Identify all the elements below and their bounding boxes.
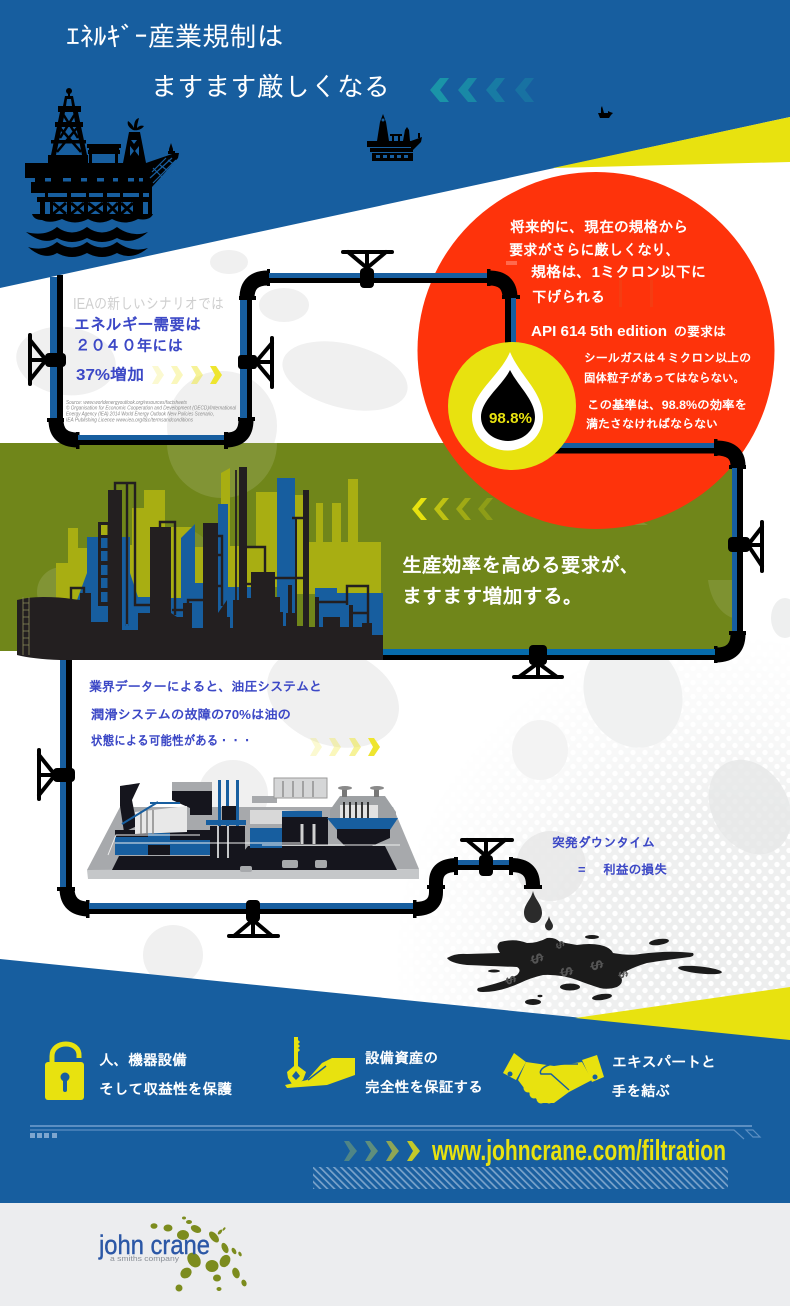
text: energy demand: IEAの新しいシナリオでは bbox=[73, 296, 224, 313]
text: industry data: 潤滑システムの故障の70%は油の bbox=[91, 707, 291, 722]
text: unexpected downtime: = bbox=[578, 862, 585, 877]
title: ｴﾈﾙｷﾞｰ産業規制は bbox=[66, 23, 284, 50]
valve: lower left pipe bbox=[39, 750, 75, 799]
yellow chevrons: industry data bbox=[310, 738, 380, 756]
valve: second vertical pipe bbox=[238, 338, 272, 387]
title bbox=[66, 23, 390, 100]
decorative rule lines bbox=[30, 1126, 760, 1139]
source note: Energy Agency (IEA) 2014 World Energy Outlook New Policies Scenario, bbox=[66, 412, 214, 418]
text: production efficiency bbox=[402, 554, 640, 608]
red circle panel bbox=[418, 172, 774, 529]
text: API 614 requirement: API 614 5th edition bbox=[531, 324, 667, 340]
text: industry data: 状態による可能性がある・・・ bbox=[91, 733, 253, 748]
text: assure integrity bbox=[365, 1050, 483, 1096]
source note: © Organisation for Economic Cooperation and Development (OECD)/International bbox=[66, 404, 237, 412]
text: energy demand: エネルギー需要は bbox=[74, 316, 201, 334]
bottom blue banner bbox=[0, 959, 790, 1203]
text: partner with experts bbox=[612, 1054, 716, 1100]
valve: top pipe bbox=[343, 252, 392, 288]
pipe: upper loop from oil rig bbox=[47, 269, 520, 449]
text: API 614 requirement: この基準は、98.8%の効率を bbox=[587, 398, 747, 412]
valve: right vertical pipe bbox=[728, 522, 762, 571]
text: industry data bbox=[89, 679, 322, 748]
oil rig, small bbox=[367, 114, 422, 161]
text: unexpected downtime: 突発ダウンタイム bbox=[552, 835, 655, 850]
text: unexpected downtime bbox=[552, 835, 667, 877]
text: energy demand bbox=[73, 296, 224, 384]
text: API 614 requirement: シールガスは４ミクロン以上の bbox=[584, 351, 751, 365]
oil drop badge 98.8%: 98.8% bbox=[489, 411, 532, 427]
top yellow wedge bbox=[553, 117, 790, 168]
bottom yellow wedge bbox=[575, 987, 790, 1040]
pipe: right loop from oil drop bbox=[383, 439, 746, 663]
john crane logo: john crane bbox=[98, 1230, 210, 1260]
text: production efficiency: 生産効率を高める要求が、 bbox=[402, 554, 640, 577]
source note: IEA Publishing Licence www.iea.org/t&c/termsandconditions bbox=[66, 418, 193, 424]
text: protect people: 人、機器設備 bbox=[99, 1052, 187, 1069]
source note bbox=[66, 400, 237, 424]
john crane logo bbox=[98, 1216, 248, 1292]
oil rig, tiny distant bbox=[598, 106, 613, 118]
text: production efficiency: ますます増加する。 bbox=[402, 585, 583, 608]
text: red circle future standards: 要求がさらに厳しくなり、 bbox=[509, 242, 680, 259]
oil drop badge 98.8% bbox=[448, 342, 576, 470]
teal chevrons beside title bbox=[430, 78, 534, 102]
footer band bbox=[0, 1203, 790, 1306]
text: assure integrity: 完全性を保証する bbox=[365, 1079, 483, 1096]
source note: Source: www.worldenergyoutlook.org/resources/factsheets bbox=[66, 400, 187, 406]
title: ますます厳しくなる bbox=[151, 73, 390, 100]
faucet bbox=[415, 840, 542, 909]
oil drops from faucet bbox=[524, 891, 553, 931]
valve: lower horizontal pipe bbox=[229, 900, 278, 936]
pipe: lower run to faucet bbox=[57, 660, 416, 918]
icon: padlock bbox=[45, 1044, 84, 1100]
john crane logo: a smiths company bbox=[110, 1254, 179, 1263]
text: API 614 requirement: 固体粒子があってはならない。 bbox=[584, 371, 745, 385]
oil spill with dollar signs: $ bbox=[552, 938, 568, 952]
yellow chevrons: energy demand bbox=[152, 366, 222, 384]
hatched bar bbox=[313, 1167, 728, 1189]
yellow chevrons in green band bbox=[412, 498, 493, 520]
text: partner with experts: 手を結ぶ bbox=[612, 1083, 670, 1100]
text: energy demand: 37%増加 bbox=[76, 366, 144, 384]
text: industry data: 業界データーによると、油圧システムと bbox=[89, 679, 322, 694]
background pattern and blobs bbox=[12, 250, 790, 1040]
text: red circle future standards: 規格は、1ミクロン以下に bbox=[531, 264, 706, 281]
green band bbox=[0, 443, 734, 651]
valve: bottom of green band bbox=[514, 645, 562, 677]
text: red circle future standards: 将来的に、現在の規格から bbox=[510, 219, 688, 236]
text: protect people bbox=[99, 1052, 233, 1098]
text: protect people: そして収益性を保護 bbox=[99, 1081, 233, 1098]
text: red circle future standards bbox=[509, 219, 706, 306]
text: energy demand: ２０４０年には bbox=[75, 337, 183, 355]
icon: key in hand bbox=[285, 1037, 355, 1088]
oil spill with dollar signs: $ bbox=[615, 969, 632, 981]
oil rig, large bbox=[25, 88, 179, 257]
oil spill with dollar signs: $ bbox=[526, 951, 548, 967]
text: assure integrity: 設備資産の bbox=[365, 1050, 438, 1067]
valve: left pipe bbox=[30, 335, 66, 384]
text: red circle future standards: 下げられる bbox=[532, 288, 605, 306]
text: API 614 requirement: の要求は bbox=[674, 324, 726, 339]
refinery skyline illustration bbox=[17, 467, 383, 660]
chevrons: website bbox=[344, 1141, 420, 1161]
oil spill with dollar signs bbox=[447, 935, 722, 1005]
icon: handshake bbox=[503, 1053, 604, 1104]
compressor machine skid bbox=[87, 778, 419, 879]
oil spill with dollar signs: $ bbox=[502, 974, 520, 987]
text: partner with experts: エキスパートと bbox=[612, 1054, 716, 1071]
oil spill with dollar signs: $ bbox=[586, 958, 607, 973]
oil spill with dollar signs: $ bbox=[556, 965, 577, 979]
text: API 614 requirement: 満たさなければならない bbox=[586, 417, 718, 431]
text: API 614 requirement bbox=[531, 324, 751, 431]
text: unexpected downtime: 利益の損失 bbox=[603, 862, 667, 877]
top blue banner bbox=[0, 0, 790, 288]
